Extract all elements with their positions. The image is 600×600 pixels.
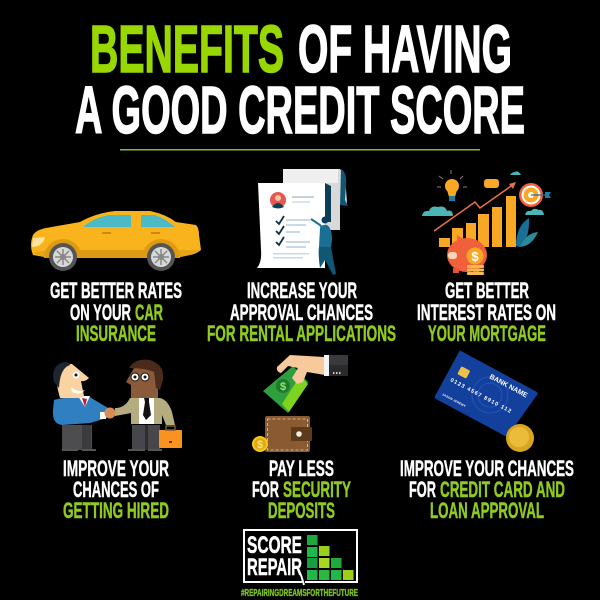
caption: rental applications [207,278,396,346]
icon: hand dropping money into wallet: $ [280,381,286,393]
caption: car insurance: ON YOUR [70,300,131,325]
caption: security deposits: SECURITY [283,477,351,502]
icon: rental application document [257,169,348,275]
logo: Score Repair: #REPAIRINGDREAMSFORTHEFUTURE [241,588,358,599]
caption: getting hired: IMPROVE YOUR [63,456,169,481]
caption: rental applications: INCREASE YOUR [247,278,357,303]
logo: Score Repair: SCORE [247,532,302,559]
caption: car insurance [50,278,182,346]
caption: getting hired [63,456,169,523]
icon: bank card and gold coin [435,351,538,452]
caption: getting hired: GETTING HIRED [63,498,169,523]
caption: credit card and loan approval: FOR [409,477,436,502]
icon: growth chart with piggy bank: $ [471,249,479,264]
logo: Score Repair [241,530,358,599]
caption: credit card and loan approval [400,456,574,523]
caption: rental applications: FOR RENTAL APPLICATIONS [207,321,396,346]
caption: security deposits: DEPOSITS [268,498,335,523]
icon: hand dropping money into wallet [252,355,348,452]
icon: bank card and gold coin: 0123 4567 8910 112 [449,377,512,415]
logo: Score Repair: REPAIR [247,554,302,581]
caption: security deposits: PAY LESS [269,456,334,481]
icon: hand dropping money into wallet: $ [257,439,263,451]
icon: yellow car [31,211,201,271]
caption: car insurance: CAR [135,300,163,325]
caption: getting hired: CHANCES OF [73,477,159,502]
caption: security deposits [252,456,351,523]
icon: bank card and gold coin: BANK NAME [488,374,529,400]
caption: security deposits: FOR [252,477,279,502]
caption: car insurance: GET BETTER RATES [50,278,182,303]
caption: car insurance: INSURANCE [76,321,156,346]
title: BENEFITS [90,12,284,87]
caption: mortgage [417,278,556,346]
icon: bank card and gold coin: JASON JEREMY [442,392,466,408]
caption: rental applications: APPROVAL CHANCES [230,300,373,325]
icon: growth chart with piggy bank [422,170,551,275]
title [75,12,525,148]
icon: two men shaking hands [53,360,182,451]
caption: mortgage: GET BETTER [445,278,529,303]
